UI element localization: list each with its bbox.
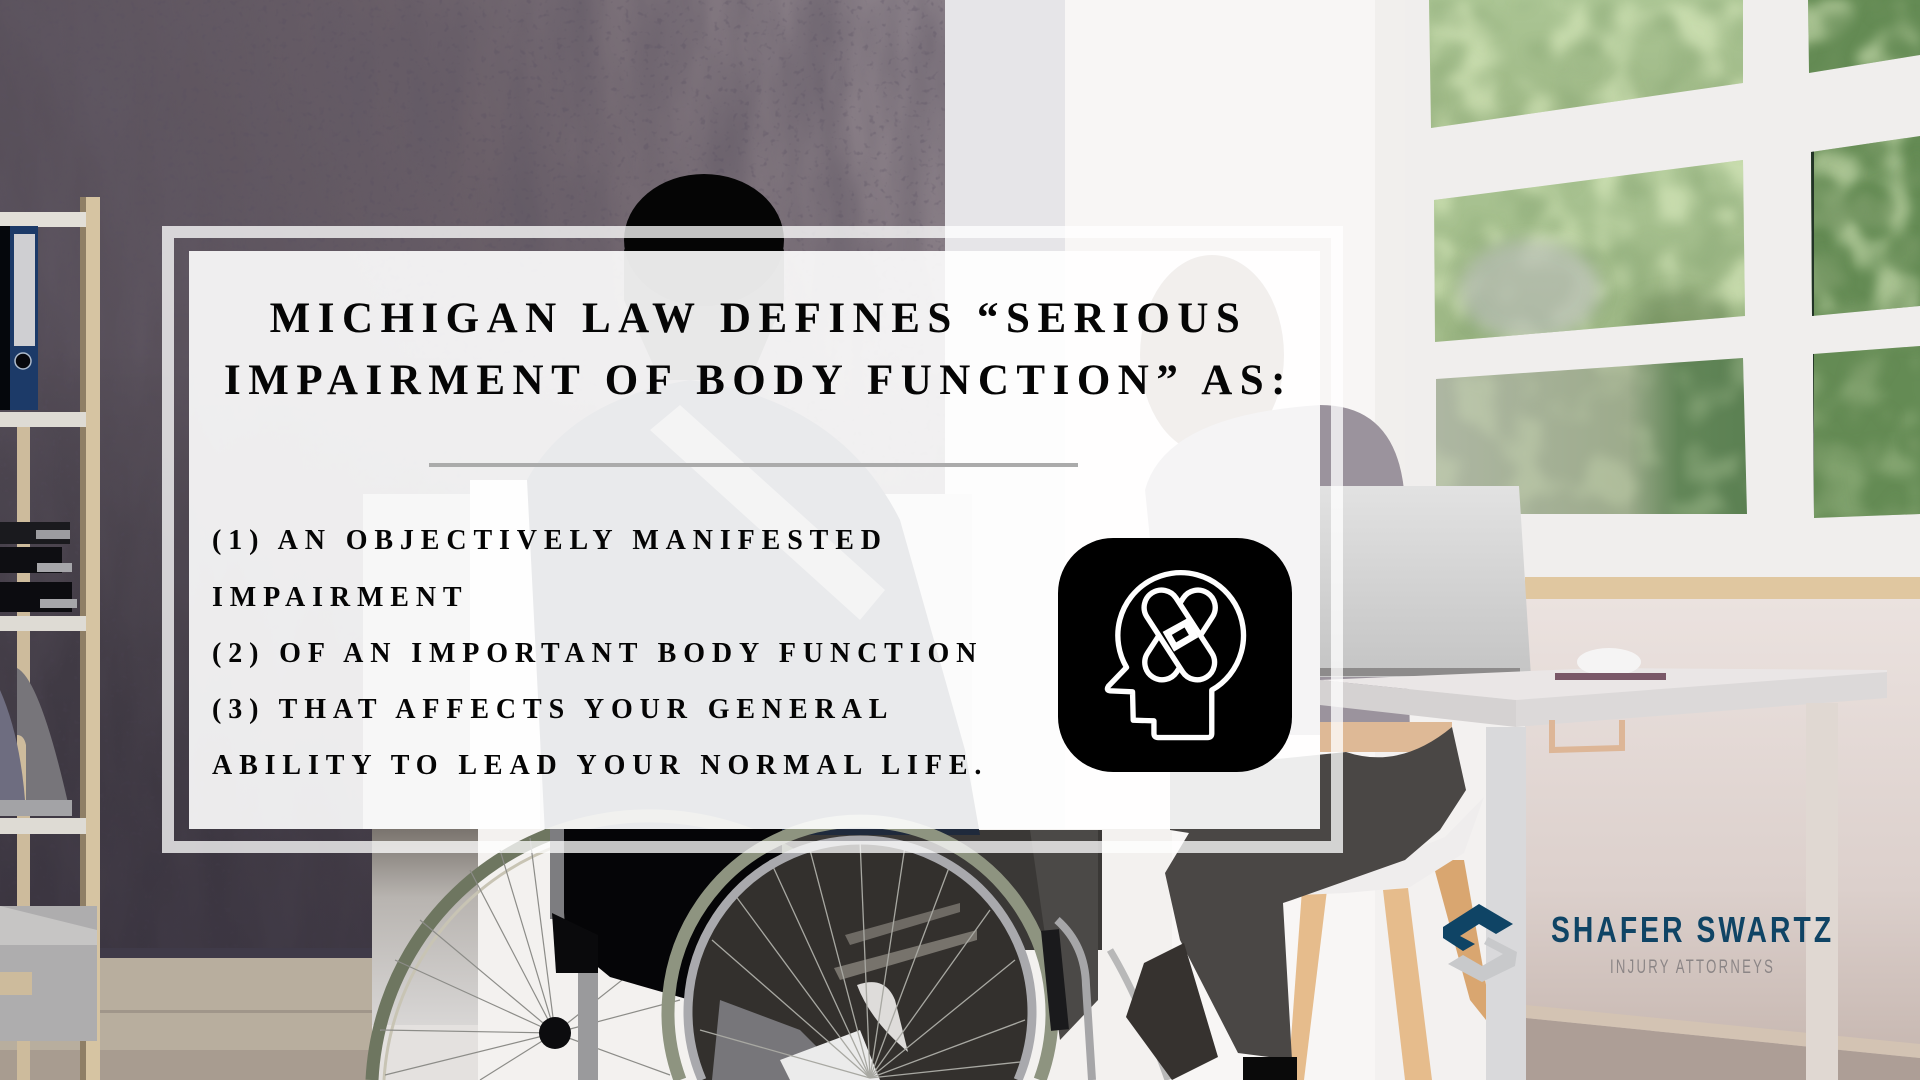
text block: three-part definition xyxy=(212,525,988,781)
logo: Shafer Swartz Injury Attorneys xyxy=(1443,904,1834,982)
logo tagline: INJURY ATTORNEYS xyxy=(1610,957,1775,978)
text block: three-part definition: (3) THAT AFFECTS YOUR GENERAL xyxy=(212,694,894,725)
heading line 2: IMPAIRMENT OF BODY FUNCTION” AS: xyxy=(224,357,1293,404)
logo name: SHAFER SWARTZ xyxy=(1551,909,1834,950)
icon: head with crossed bandages xyxy=(1058,538,1292,772)
divider xyxy=(429,463,1078,467)
panel: definition card xyxy=(189,251,1320,829)
heading line 1: MICHIGAN LAW DEFINES “SERIOUS xyxy=(270,295,1247,342)
text block: three-part definition: (2) OF AN IMPORTANT BODY FUNCTION xyxy=(212,638,983,669)
text block: three-part definition: (1) AN OBJECTIVELY MANIFESTED xyxy=(212,525,888,556)
outer translucent frame xyxy=(162,226,1343,853)
logo mark xyxy=(1443,904,1517,982)
text block: three-part definition: IMPAIRMENT xyxy=(212,582,468,613)
text block: three-part definition: ABILITY TO LEAD YOUR NORMAL LIFE. xyxy=(212,750,988,781)
